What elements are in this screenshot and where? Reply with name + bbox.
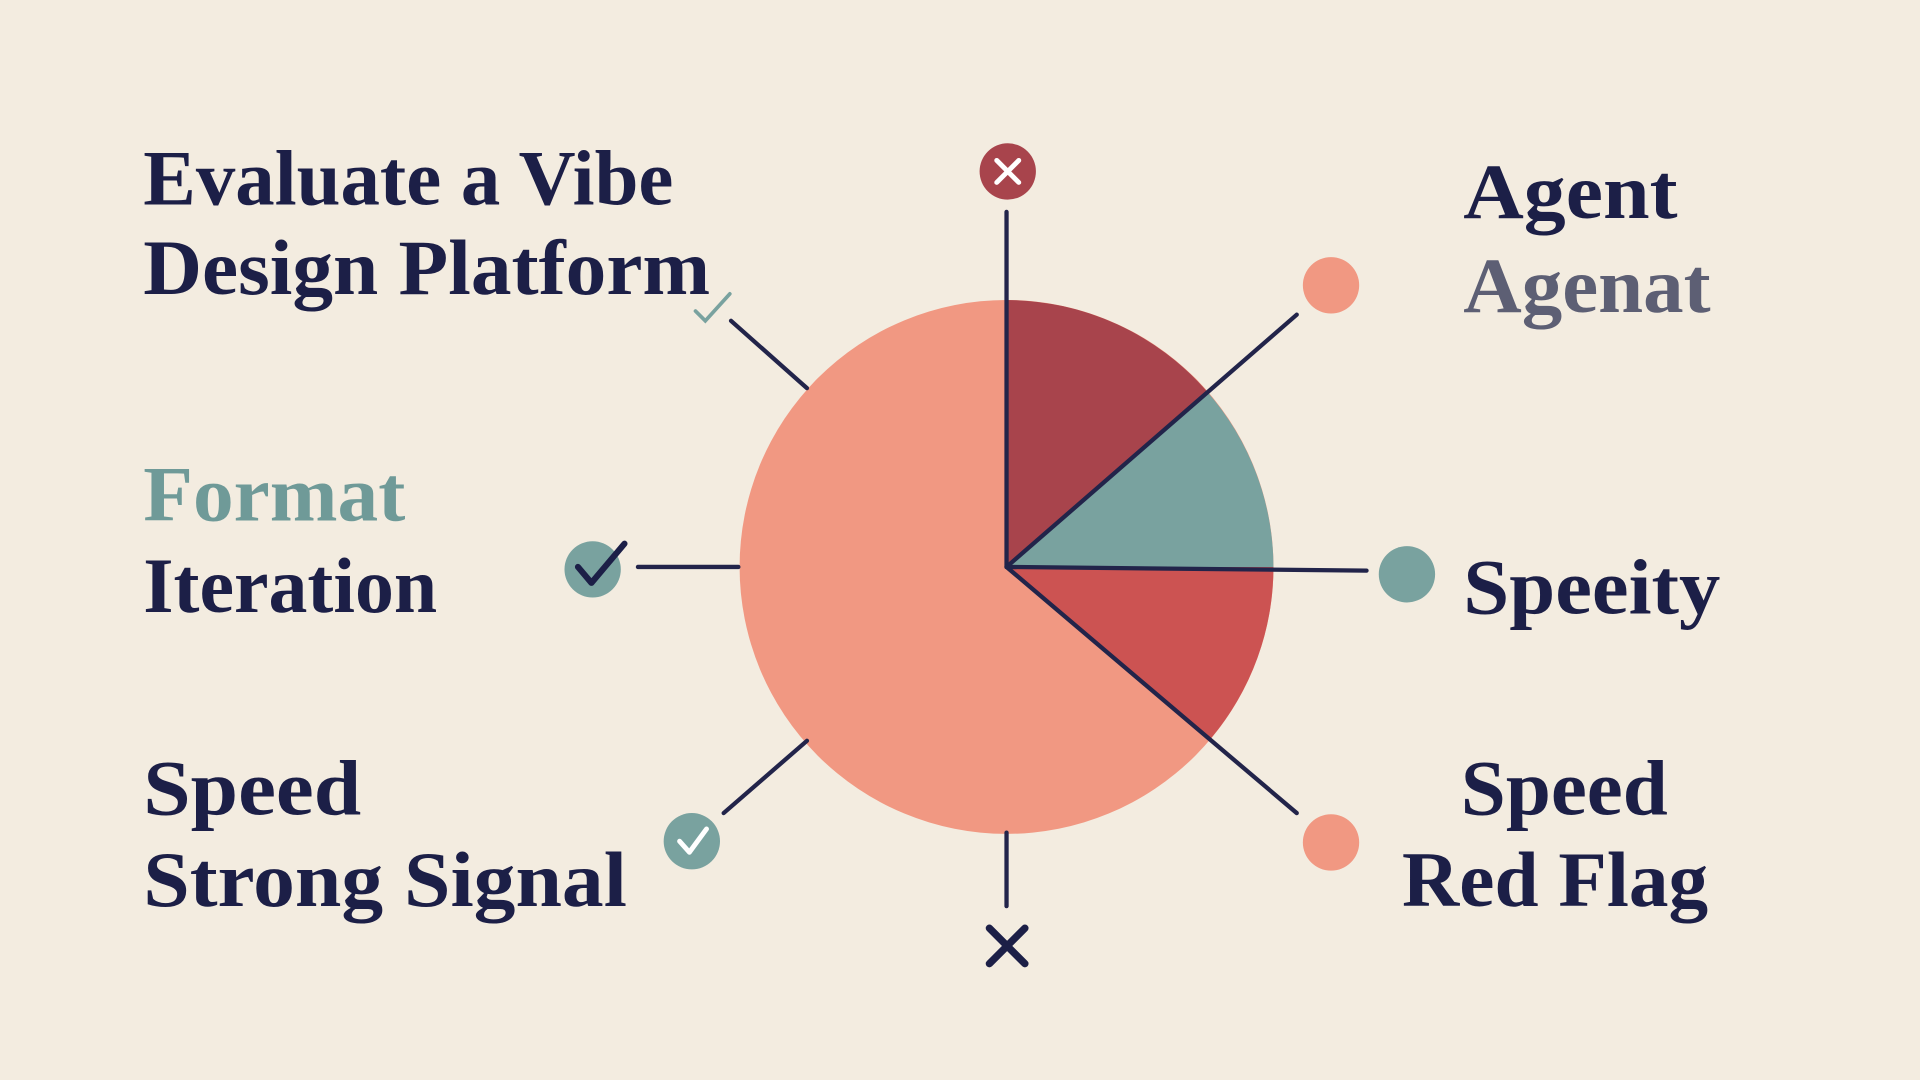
- title: Evaluate a Vibe: [143, 134, 673, 221]
- label: speed strong signal: Strong Signal: [143, 836, 627, 923]
- label: speed red flag: [1402, 744, 1708, 923]
- icon: salmon dot bottom right: [1303, 814, 1359, 871]
- label: format iteration: Iteration: [143, 542, 437, 629]
- label: speed red flag: Red Flag: [1402, 836, 1708, 923]
- label: agent: Agenat: [1463, 242, 1711, 329]
- label: speed strong signal: Speed: [143, 744, 361, 831]
- icon: bottom-left check: [664, 813, 720, 869]
- label: speed red flag: Speed: [1461, 744, 1668, 831]
- title: [143, 134, 710, 311]
- label: format iteration: Format: [143, 450, 405, 537]
- icon: small check: [696, 294, 730, 321]
- icon: bottom x: [989, 928, 1025, 964]
- connector lines: [638, 212, 1367, 906]
- label: speed strong signal: [143, 744, 627, 923]
- label: speeity: Speeity: [1463, 543, 1720, 630]
- label: format iteration: [143, 450, 437, 629]
- icon: top red x: [980, 143, 1036, 200]
- icon: teal dot right: [1379, 546, 1435, 602]
- label: agent: [1463, 148, 1711, 329]
- pie chart: [740, 300, 1273, 834]
- label: agent: Agent: [1463, 148, 1678, 235]
- icon: left check: [564, 541, 624, 598]
- icon: salmon dot top right: [1303, 257, 1359, 313]
- title: Design Platform: [143, 224, 710, 311]
